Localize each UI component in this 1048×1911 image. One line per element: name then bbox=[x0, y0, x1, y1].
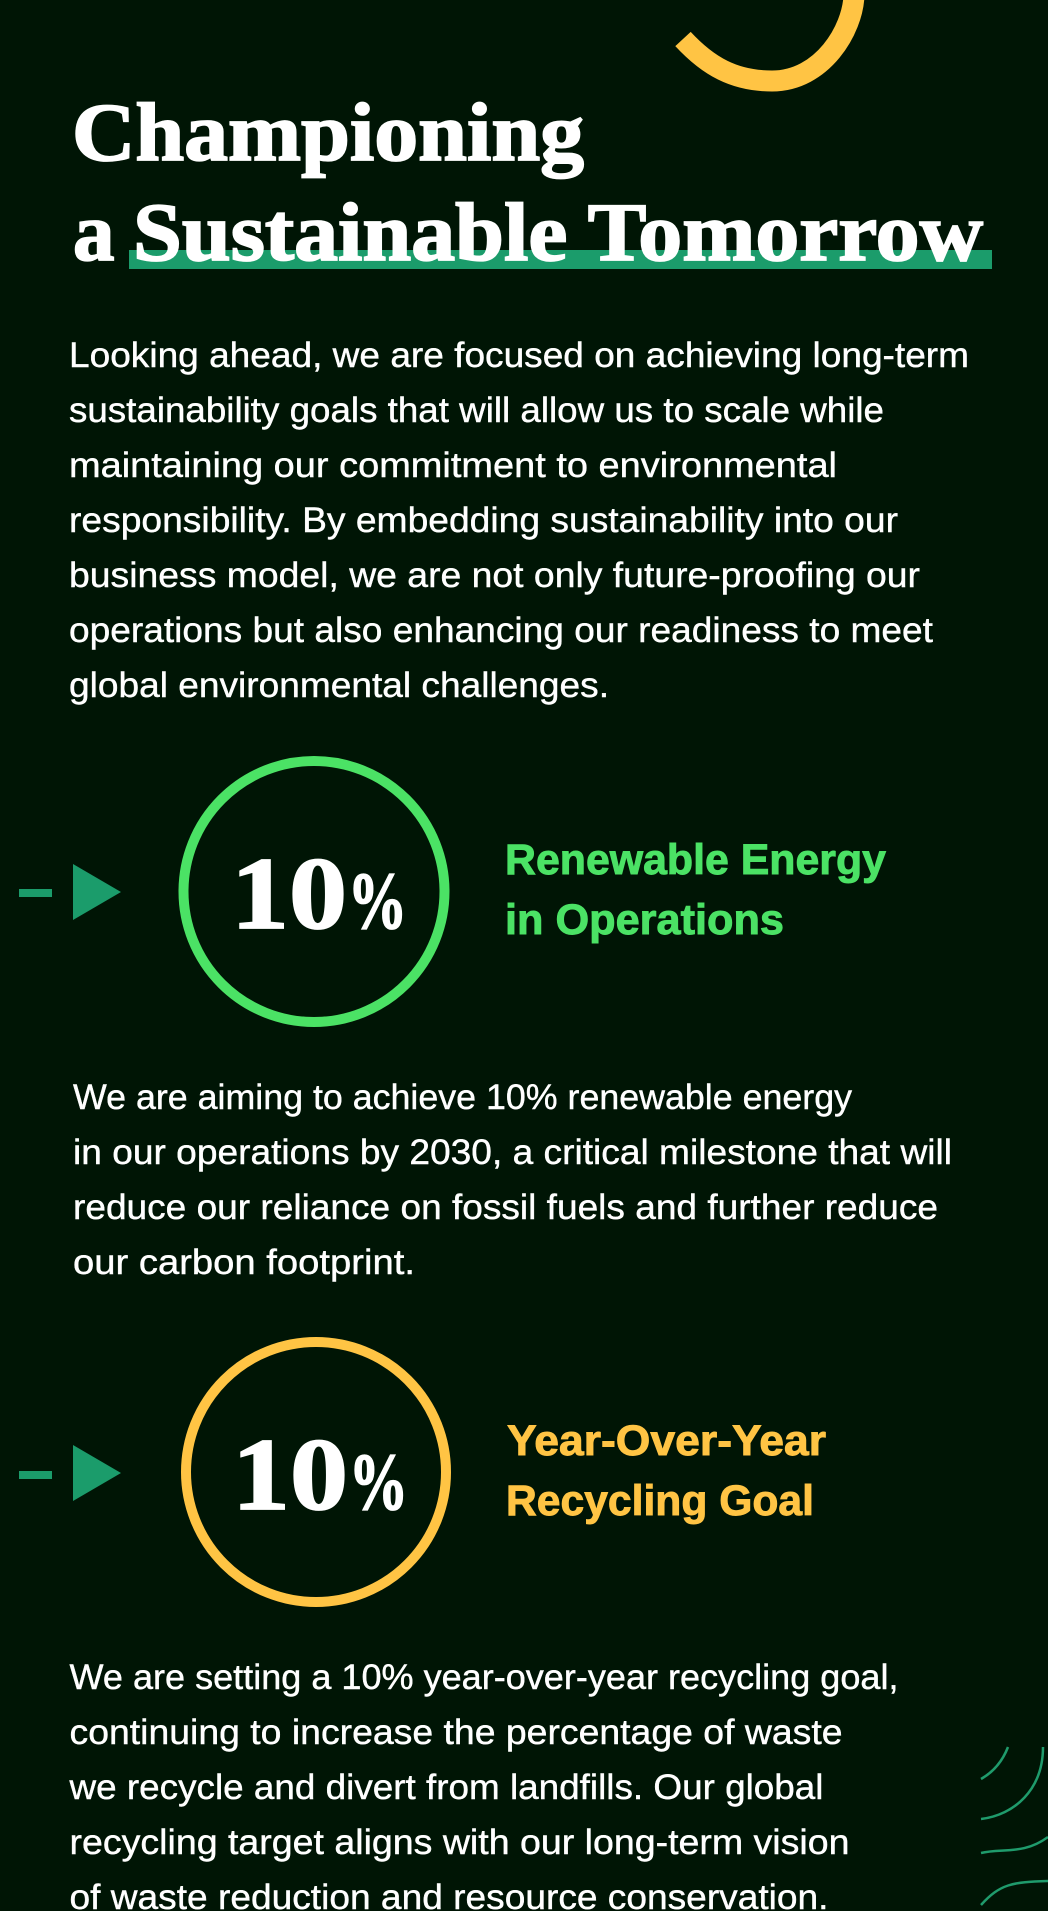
intro paragraph: business model, we are not only future-proofing our bbox=[69, 556, 920, 595]
intro paragraph: operations but also enhancing our readiness to meet bbox=[69, 611, 933, 650]
renewable energy paragraph: in our operations by 2030, a critical milestone that will bbox=[73, 1133, 952, 1172]
stat circle: 10% recycling bbox=[186, 1342, 446, 1602]
title line 2 article: a bbox=[73, 186, 114, 278]
title line 2 phrase: Sustainable Tomorrow bbox=[133, 186, 983, 278]
renewable energy paragraph bbox=[73, 1078, 952, 1282]
title bbox=[72, 86, 992, 278]
decorative yellow arc bbox=[683, 0, 854, 81]
title line 1: Championing bbox=[72, 86, 584, 178]
renewable energy paragraph: reduce our reliance on fossil fuels and further reduce bbox=[73, 1188, 938, 1227]
renewable energy paragraph: our carbon footprint. bbox=[73, 1243, 415, 1282]
arrow: renewable energy bbox=[19, 864, 121, 920]
arrow: recycling bbox=[19, 1445, 121, 1501]
heading: renewable energy in operations: in Operations bbox=[505, 896, 784, 944]
intro paragraph: responsibility. By embedding sustainability into our bbox=[69, 501, 898, 540]
intro paragraph bbox=[69, 336, 969, 705]
heading: year-over-year recycling goal bbox=[506, 1417, 826, 1525]
recycling paragraph bbox=[68, 1658, 899, 1911]
stat circle: 10% renewable energy: 10 bbox=[231, 837, 347, 951]
stat circle: 10% recycling: % bbox=[349, 1439, 408, 1527]
title underline highlight bbox=[129, 250, 992, 269]
heading: year-over-year recycling goal: Recycling Goal bbox=[506, 1477, 814, 1525]
decorative green curves bbox=[981, 1747, 1048, 1905]
recycling paragraph: recycling target aligns with our long-term vision bbox=[70, 1823, 850, 1862]
heading: renewable energy in operations bbox=[505, 836, 886, 944]
heading: renewable energy in operations: Renewable Energy bbox=[505, 836, 886, 884]
stat circle: 10% renewable energy bbox=[184, 761, 444, 1022]
recycling paragraph: We are setting a 10% year-over-year recycling goal, bbox=[70, 1658, 899, 1697]
heading: year-over-year recycling goal: Year-Over-Year bbox=[507, 1417, 826, 1465]
intro paragraph: maintaining our commitment to environmental bbox=[69, 446, 837, 485]
recycling paragraph: continuing to increase the percentage of waste bbox=[70, 1713, 842, 1752]
intro paragraph: global environmental challenges. bbox=[69, 666, 609, 705]
stat circle: 10% recycling: 10 bbox=[232, 1418, 348, 1532]
intro paragraph: Looking ahead, we are focused on achieving long-term bbox=[69, 336, 969, 375]
stat circle: 10% renewable energy: % bbox=[348, 858, 407, 946]
renewable energy paragraph: We are aiming to achieve 10% renewable energy bbox=[73, 1078, 852, 1117]
recycling paragraph: we recycle and divert from landfills. Our global bbox=[68, 1768, 824, 1807]
intro paragraph: sustainability goals that will allow us to scale while bbox=[69, 391, 884, 430]
